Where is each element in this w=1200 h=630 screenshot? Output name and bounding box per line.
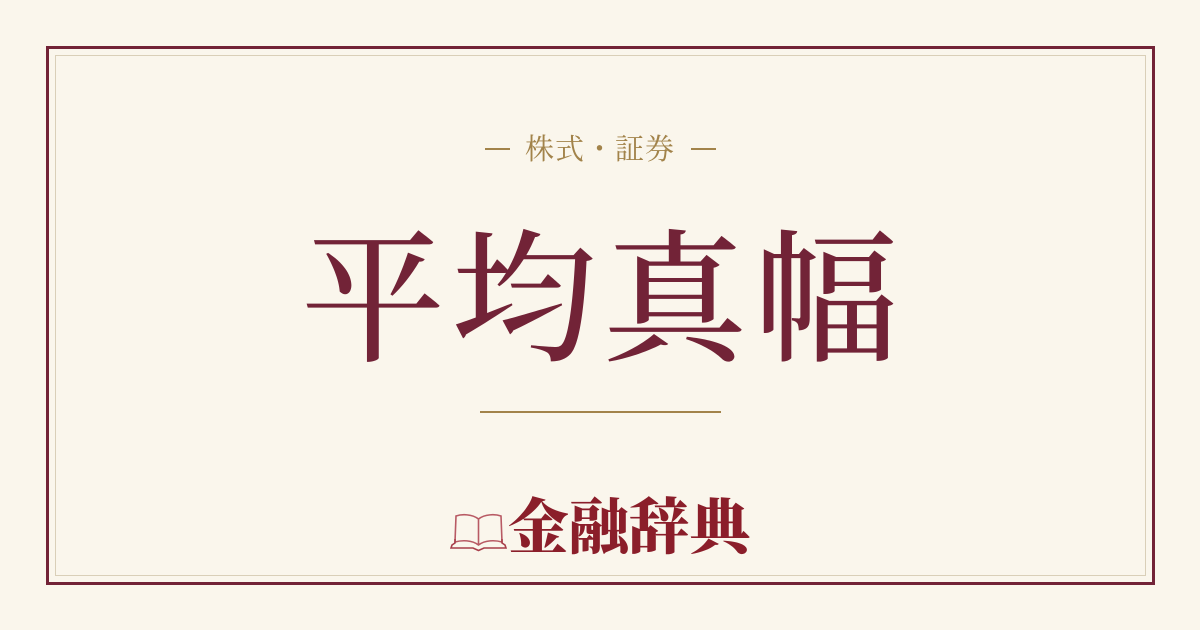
logo (450, 495, 750, 562)
title: 平均真幅 (301, 223, 905, 382)
right dash (691, 148, 716, 150)
icon: open book (450, 514, 507, 552)
category text: 株式・証券 (525, 134, 675, 166)
left dash (485, 148, 510, 150)
logo wordmark: 金融辞典 (508, 495, 750, 562)
outer frame (46, 46, 1155, 585)
inner frame (55, 55, 1146, 576)
divider (480, 411, 721, 413)
